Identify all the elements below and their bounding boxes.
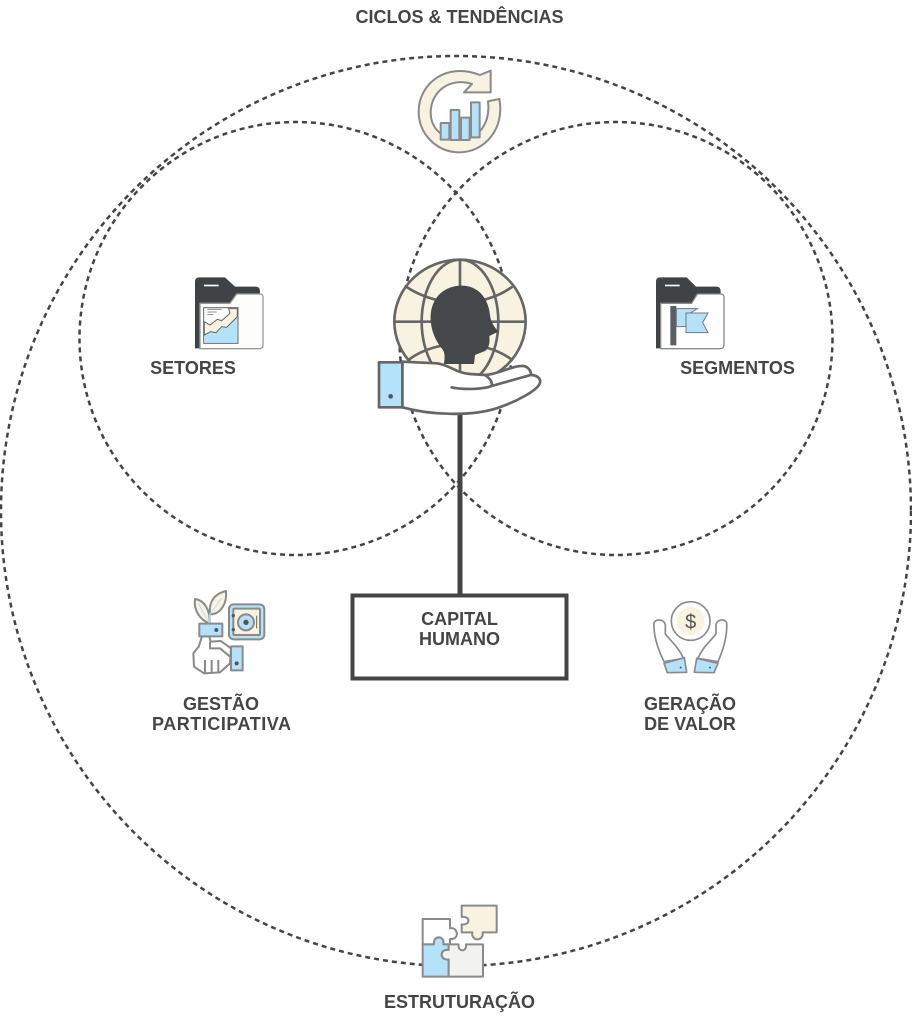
icon: folder with chart	[195, 277, 263, 349]
label: gestao participativa: GESTÃO	[183, 693, 259, 714]
right dashed circle	[400, 122, 832, 555]
icon: globe with head on hand	[379, 260, 540, 414]
icon: hands holding coin: $	[685, 611, 696, 633]
label: geracao de valor	[644, 693, 736, 734]
box: capital humano: HUMANO	[419, 629, 500, 649]
label: gestao participativa: PARTICIPATIVA	[152, 714, 291, 734]
heading: ciclos e tendencias: CICLOS & TENDÊNCIAS	[355, 6, 564, 27]
box: capital humano: CAPITAL	[421, 609, 498, 629]
icon: plant, safe and handshake	[193, 591, 264, 673]
icon: folder with flags	[656, 277, 724, 349]
label: setores: SETORES	[150, 358, 236, 378]
icon: hands holding coin	[654, 602, 727, 673]
label: geracao de valor: GERAÇÃO	[644, 693, 736, 714]
icon: puzzle pieces	[423, 906, 497, 977]
label: segmentos: SEGMENTOS	[680, 358, 795, 378]
label: geracao de valor: DE VALOR	[644, 714, 736, 734]
connector line	[458, 412, 462, 596]
icon: cycle with bar chart	[419, 71, 500, 152]
label: gestao participativa	[152, 693, 291, 734]
box: capital humano	[352, 596, 566, 678]
label: estruturacao: ESTRUTURAÇÃO	[384, 991, 535, 1012]
left dashed circle	[80, 122, 512, 555]
